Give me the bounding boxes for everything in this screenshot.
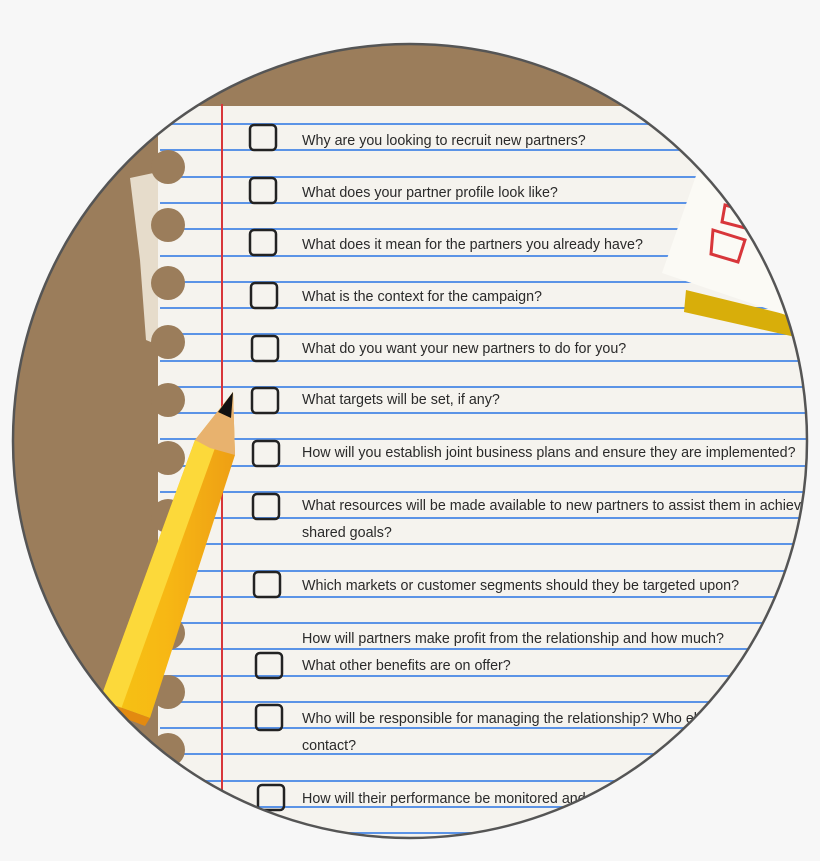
checklist questions: Why are you looking to recruit new partners? [302,133,586,149]
checklist questions: What do you want your new partners to do for you? [302,341,626,357]
checklist questions: How will you establish joint business plans and ensure they are implemented? [302,445,796,461]
checklist questions: What does your partner profile look like? [302,185,558,201]
checklist questions: Which markets or customer segments should they be targeted upon? [302,578,739,594]
checklist questions: How will their performance be monitored and reviewed? [302,791,655,807]
checklist questions: What other benefits are on offer? [302,658,511,674]
checklist questions [302,133,820,807]
checklist questions: contact? [302,738,356,754]
checklist questions: What is the context for the campaign? [302,289,542,305]
ruled lines [160,124,820,833]
checklist questions: What resources will be made available to new partners to assist them in achieving [302,498,820,514]
margin line [221,104,223,861]
sticky note [668,176,792,336]
checkboxes [250,125,284,810]
checklist questions: What targets will be set, if any? [302,392,500,408]
pencil [98,392,235,726]
paper sheet [158,104,820,861]
checklist questions: How will partners make profit from the relationship and how much? [302,631,724,647]
torn paper bits [130,172,158,345]
checklist questions: What does it mean for the partners you already have? [302,237,643,253]
binder holes [151,150,185,825]
checklist questions: Who will be responsible for managing the relationship? Who else will be a point of [302,711,819,727]
checklist questions: shared goals? [302,525,392,541]
